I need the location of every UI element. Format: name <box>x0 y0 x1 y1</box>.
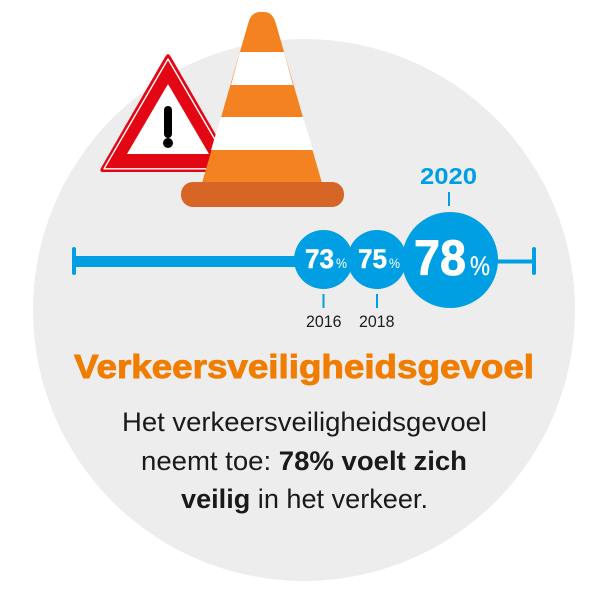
data point 2016: % <box>336 255 347 271</box>
body text: veilig in het verkeer. <box>181 484 428 514</box>
body text: Het verkeersveiligheidsgevoel <box>122 407 487 437</box>
data point 2020: 2020 <box>420 163 477 189</box>
data point 2020: 78 <box>414 230 466 286</box>
data point 2018: 75 <box>358 244 387 274</box>
icon: warning triangle <box>100 54 236 172</box>
body text: neemt toe: 78% voelt zich <box>141 446 467 476</box>
data point 2018 <box>348 230 406 331</box>
data point 2018: % <box>389 255 400 271</box>
data point 2020 <box>402 163 498 308</box>
body text <box>122 407 487 514</box>
heading: Verkeersveiligheidsgevoel <box>74 348 534 385</box>
icon: traffic cone <box>181 12 344 207</box>
data point 2020: % <box>470 251 490 281</box>
data point 2016: 73 <box>305 244 334 274</box>
timeline <box>72 163 536 331</box>
data point 2016 <box>294 230 353 331</box>
data point 2018: 2018 <box>359 312 394 331</box>
data point 2016: 2016 <box>306 312 342 331</box>
